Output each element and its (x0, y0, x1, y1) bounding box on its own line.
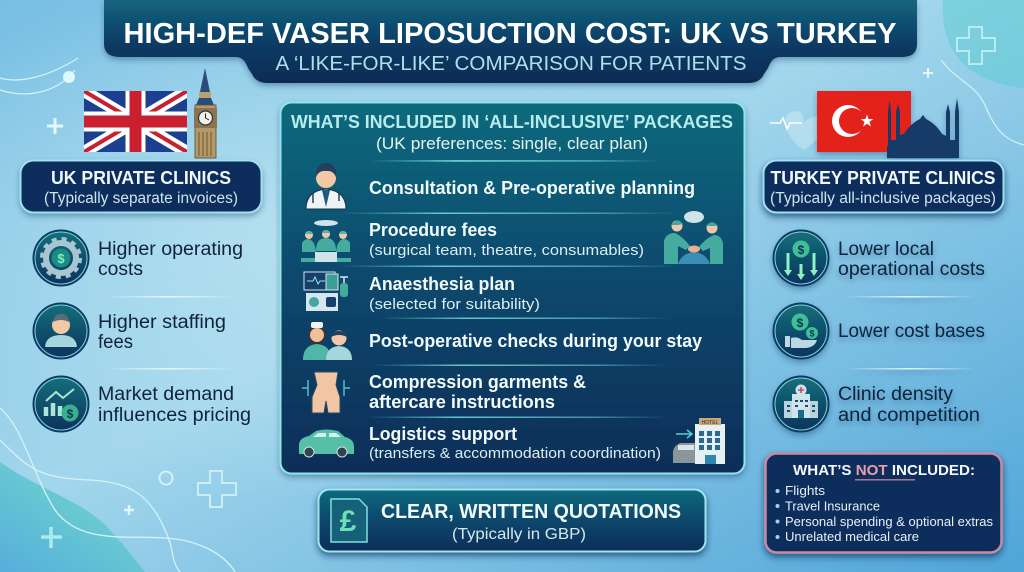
row: compression garments: aftercare instructions (369, 392, 555, 412)
icon: dollar with down arrows: $ (798, 243, 805, 257)
list: Personal spending & optional extras (785, 515, 993, 529)
text: Higher operating (98, 239, 243, 260)
text: Procedure fees (369, 220, 497, 240)
icon: dollar with down arrows (772, 230, 830, 286)
icon: car (299, 430, 354, 457)
icon: doctor (32, 302, 90, 360)
Turkey item: clinic density: and competition (838, 405, 980, 426)
text: Clinic density (838, 384, 954, 405)
UK heading note: (Typically separate invoices) (44, 190, 238, 207)
row: logistics: (transfers & accommodation coordination) (369, 445, 661, 462)
Turkey heading note: (Typically all-inclusive packages) (770, 190, 996, 207)
UK item: staffing fees: fees (98, 332, 133, 353)
panel: Turkey heading (764, 160, 1004, 212)
UK heading text: UK PRIVATE CLINICS (51, 168, 231, 188)
icon: nurse and patient (303, 322, 352, 360)
text: Compression garments & (369, 372, 586, 392)
icon: Big Ben (194, 68, 217, 158)
icon: surgical team (301, 220, 351, 262)
icon: hand with coins: $ (797, 316, 804, 330)
row: post-operative checks (303, 322, 702, 360)
UK item: staffing fees (32, 302, 226, 360)
icon: hotel and car: HOTEL (702, 420, 719, 426)
icon: gear with dollar (32, 230, 90, 286)
icon: compression garment (302, 372, 350, 413)
row: anaesthesia: (selected for suitability) (369, 296, 540, 313)
row: consultation (306, 163, 695, 209)
subtitle: A ‘LIKE-FOR-LIKE’ COMPARISON FOR PATIENTS (276, 53, 746, 75)
icon: clinic building (772, 376, 830, 432)
title: HIGH-DEF VASER LIPOSUCTION COST: UK VS TURKEY (124, 18, 896, 50)
UK item: market demand: influences pricing (98, 405, 251, 426)
icon: chart with dollar: $ (67, 407, 74, 421)
title banner (104, 0, 917, 83)
list: Travel Insurance (785, 500, 880, 514)
Turkey item: cost bases (772, 302, 985, 360)
icon: doctor (306, 163, 346, 209)
panel: UK heading (20, 160, 262, 212)
row: procedure fees: (surgical team, theatre, consumables) (369, 242, 644, 259)
list (776, 484, 993, 544)
text: CLEAR, WRITTEN QUOTATIONS (381, 501, 681, 523)
icon: UK flag (84, 91, 187, 152)
icon: anaesthesia machine (304, 272, 348, 311)
UK item: operating costs (32, 230, 243, 286)
panel: written quotations (318, 490, 706, 552)
text: Consultation & Pre-operative planning (369, 178, 695, 198)
panel heading: WHAT’S NOT INCLUDED: (793, 462, 975, 479)
panel: what's not included (766, 454, 1002, 552)
panel: written quotations: (Typically in GBP) (452, 526, 586, 543)
row: compression garments (302, 372, 586, 413)
Turkey heading text: TURKEY PRIVATE CLINICS (770, 168, 996, 188)
icon: mosque silhouette (887, 98, 959, 158)
text: Post-operative checks during your stay (369, 331, 702, 351)
icon: hand with coins (772, 302, 830, 360)
text: Higher staffing (98, 312, 226, 333)
icon: chart with dollar (32, 376, 90, 432)
row: anaesthesia (304, 272, 540, 313)
Turkey item: clinic density (772, 376, 980, 432)
icon: Turkish flag (817, 91, 911, 152)
row: logistics (299, 418, 725, 464)
text: Anaesthesia plan (369, 274, 515, 294)
Turkey item: operational costs (772, 230, 985, 286)
text: Logistics support (369, 424, 517, 444)
icon: hand with coins: $ (809, 328, 815, 338)
text: Lower cost bases (838, 321, 985, 342)
UK item: operating costs: costs (98, 259, 143, 280)
icon: gear with dollar: $ (57, 251, 65, 266)
icon: hotel and car (673, 418, 725, 464)
panel heading: WHAT’S INCLUDED IN ‘ALL-INCLUSIVE’ PACKAGES (291, 112, 733, 132)
icon: pound document (331, 499, 367, 542)
list: Flights (785, 484, 825, 498)
UK item: market demand (32, 376, 251, 432)
text: Lower local (838, 239, 934, 260)
Turkey item: operational costs: operational costs (838, 259, 985, 280)
icon: pound document: £ (340, 505, 357, 538)
list: Unrelated medical care (785, 530, 919, 544)
icon: surgeons operating (664, 211, 723, 264)
row: procedure fees (301, 211, 723, 264)
text: Market demand (98, 384, 234, 405)
panel subheading: (UK preferences: single, clear plan) (376, 135, 648, 153)
panel: what's included (280, 91, 1004, 552)
